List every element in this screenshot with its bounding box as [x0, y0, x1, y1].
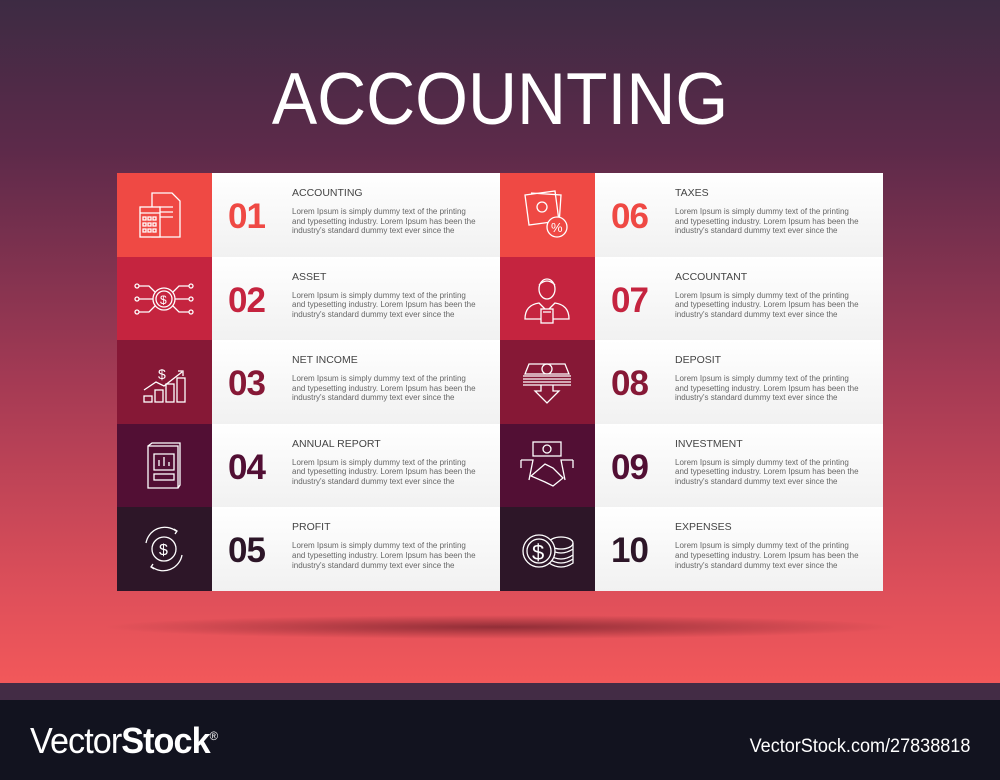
row 02: industry's standard dummy text ever since the: [292, 310, 454, 319]
row 02: ASSET: [292, 271, 326, 283]
row 03: $: [158, 366, 166, 382]
row 09: and typesetting industry. Lorem Ipsum has been the: [675, 467, 859, 476]
row 05: [117, 507, 500, 591]
row 10: EXPENSES: [675, 521, 732, 533]
row 07: [500, 257, 883, 340]
shadow: [100, 615, 900, 639]
row 06: %: [551, 220, 563, 235]
row 02: $: [160, 293, 167, 307]
row 07: 07: [611, 281, 648, 320]
row 09: 09: [611, 448, 648, 487]
row 03: industry's standard dummy text ever since the: [292, 393, 454, 402]
row 07: industry's standard dummy text ever since the: [675, 310, 838, 319]
row 03: 03: [228, 364, 265, 403]
row 01: 01: [228, 197, 265, 236]
row 05: industry's standard dummy text ever since the: [292, 561, 454, 570]
band: [0, 683, 1000, 700]
title: ACCOUNTING: [272, 59, 728, 140]
row 04: and typesetting industry. Lorem Ipsum has been the: [292, 467, 476, 476]
row 10: Lorem Ipsum is simply dummy text of the printing: [675, 541, 849, 550]
row 03: [117, 340, 500, 424]
row 08: DEPOSIT: [675, 354, 721, 366]
row 03: Lorem Ipsum is simply dummy text of the printing: [292, 374, 466, 383]
row 10: 10: [611, 531, 648, 570]
footer: [0, 700, 1000, 780]
row 08: [500, 340, 883, 424]
row 08: industry's standard dummy text ever since the: [675, 393, 838, 402]
row 05: 05: [228, 531, 265, 570]
row 07: ACCOUNTANT: [675, 271, 747, 283]
row 06: TAXES: [675, 187, 709, 199]
row 08: Lorem Ipsum is simply dummy text of the printing: [675, 374, 849, 383]
row 01: industry's standard dummy text ever since the: [292, 226, 454, 235]
row 01: [117, 173, 500, 257]
row 04: Lorem Ipsum is simply dummy text of the printing: [292, 458, 466, 467]
row 05: Lorem Ipsum is simply dummy text of the printing: [292, 541, 466, 550]
row 02: 02: [228, 281, 265, 320]
row 04: industry's standard dummy text ever since the: [292, 477, 454, 486]
row 05: $: [159, 542, 168, 559]
row 08: and typesetting industry. Lorem Ipsum has been the: [675, 384, 859, 393]
row 05: PROFIT: [292, 521, 330, 533]
row 03: NET INCOME: [292, 354, 358, 366]
row 05: and typesetting industry. Lorem Ipsum has been the: [292, 551, 476, 560]
row 09: industry's standard dummy text ever since the: [675, 477, 838, 486]
row 04: ANNUAL REPORT: [292, 438, 381, 450]
row 06: and typesetting industry. Lorem Ipsum has been the: [675, 217, 859, 226]
row 09: INVESTMENT: [675, 438, 743, 450]
row 01: and typesetting industry. Lorem Ipsum has been the: [292, 217, 476, 226]
row 06: Lorem Ipsum is simply dummy text of the printing: [675, 207, 849, 216]
row 09: [500, 424, 883, 507]
row 02: and typesetting industry. Lorem Ipsum has been the: [292, 300, 476, 309]
row 04: 04: [228, 448, 265, 487]
row 06: industry's standard dummy text ever since the: [675, 226, 838, 235]
row 10: industry's standard dummy text ever since the: [675, 561, 838, 570]
row 06: 06: [611, 197, 648, 236]
row 07: and typesetting industry. Lorem Ipsum has been the: [675, 300, 859, 309]
logo: VectorStock®: [30, 720, 217, 761]
table: [117, 173, 883, 591]
row 02: [117, 257, 500, 340]
row 02: Lorem Ipsum is simply dummy text of the printing: [292, 291, 466, 300]
row 06: [500, 173, 883, 257]
row 03: and typesetting industry. Lorem Ipsum has been the: [292, 384, 476, 393]
row 08: 08: [611, 364, 648, 403]
row 10: and typesetting industry. Lorem Ipsum has been the: [675, 551, 859, 560]
row 10: [500, 507, 883, 591]
row 01: ACCOUNTING: [292, 187, 363, 199]
row 09: Lorem Ipsum is simply dummy text of the printing: [675, 458, 849, 467]
url: VectorStock.com/27838818: [749, 736, 970, 757]
row 07: Lorem Ipsum is simply dummy text of the printing: [675, 291, 849, 300]
row 01: Lorem Ipsum is simply dummy text of the printing: [292, 207, 466, 216]
row 04: [117, 424, 500, 507]
row 10: $: [532, 540, 544, 565]
